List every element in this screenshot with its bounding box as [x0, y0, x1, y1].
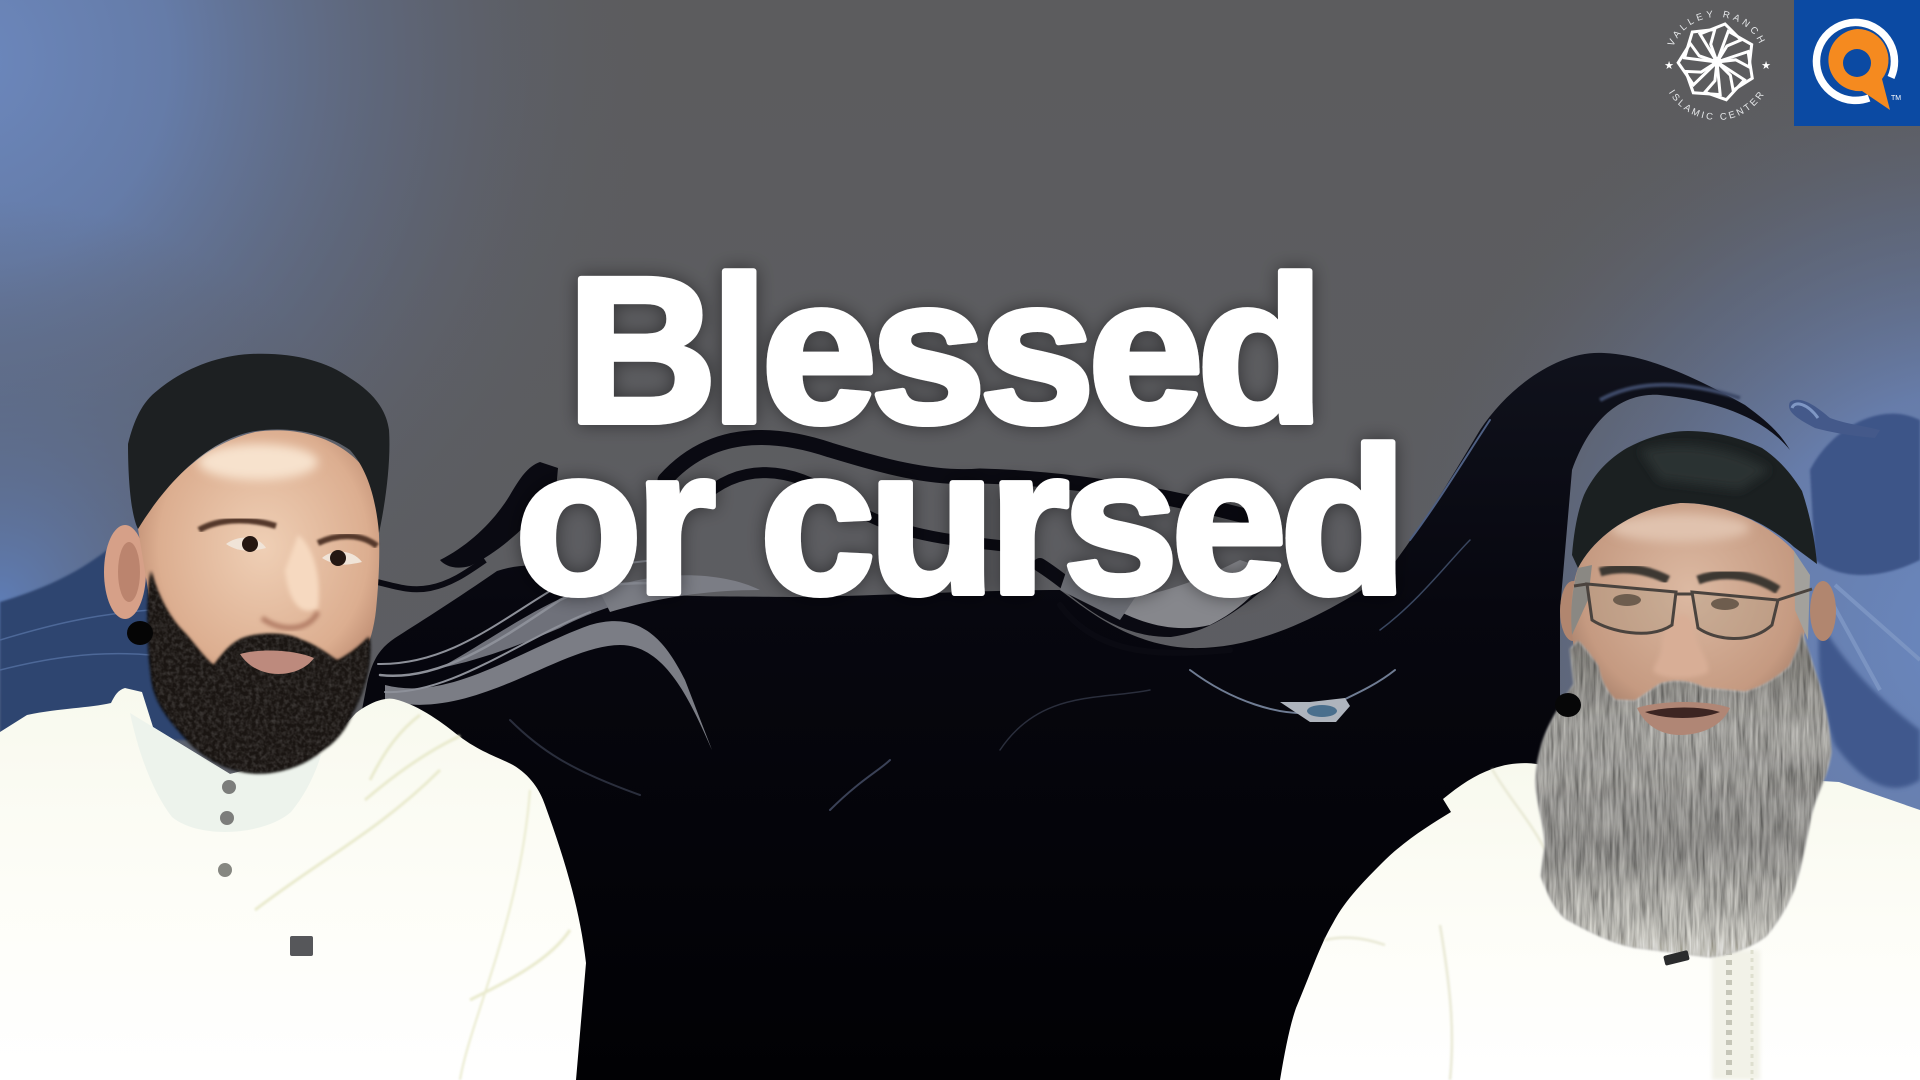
hair at temples: [1571, 565, 1592, 635]
lapel mic: [127, 621, 153, 645]
ears: [1560, 581, 1586, 641]
nose: [1654, 615, 1708, 678]
white ring: [1816, 22, 1894, 100]
grey swirl streaks: [385, 560, 1270, 750]
robe: [1280, 763, 1920, 1080]
title line 1: Blessed: [567, 235, 1324, 467]
eyes: [1613, 594, 1641, 606]
mic pack: [1663, 950, 1690, 966]
ring stars: ★: [1664, 59, 1674, 72]
collar: [130, 713, 321, 832]
title line 2: or cursed: [515, 406, 1407, 638]
beard: [148, 571, 370, 773]
logo: Valley Ranch Islamic Center: [1664, 10, 1771, 120]
eyebrows: [1600, 569, 1668, 580]
cap: [1572, 431, 1817, 568]
swirl gem: [1280, 698, 1350, 722]
title: [515, 235, 1407, 638]
mouth: [1637, 702, 1730, 735]
right blue ink shapes: [1789, 400, 1920, 788]
orange pin: [1828, 29, 1890, 110]
buttons: [222, 780, 236, 794]
logo: Valley Ranch Islamic Center: ★: [1761, 59, 1771, 72]
embroidered placket: [1712, 950, 1760, 1080]
black ink swirl: [360, 353, 1790, 1080]
ring text: VALLEY RANCH: [1667, 10, 1765, 44]
cap: [128, 354, 389, 533]
person: right speaker: [1280, 431, 1920, 1080]
ear: [104, 525, 146, 619]
beard: [1536, 632, 1831, 957]
face: [1571, 503, 1807, 752]
person: left speaker: [0, 354, 586, 1080]
left blue ink wave: [0, 540, 200, 740]
logo: Valley Ranch Islamic Center: ISLAMIC CENTER: [1669, 90, 1764, 120]
flower mark: [1675, 20, 1762, 107]
ink arcs behind title: [665, 438, 1270, 653]
ink spike and thin swoosh: [440, 462, 558, 568]
eyebrows and eyes: [199, 520, 276, 530]
glasses: [1574, 584, 1812, 639]
robe: [0, 688, 586, 1080]
hood folds: [255, 715, 570, 1080]
robe folds: [1325, 769, 1545, 1080]
mic pack: [290, 936, 313, 956]
face: [138, 430, 379, 710]
logo: Q badge: [1794, 0, 1920, 126]
trademark: TM: [1891, 95, 1901, 102]
headset mic: [1555, 693, 1581, 717]
